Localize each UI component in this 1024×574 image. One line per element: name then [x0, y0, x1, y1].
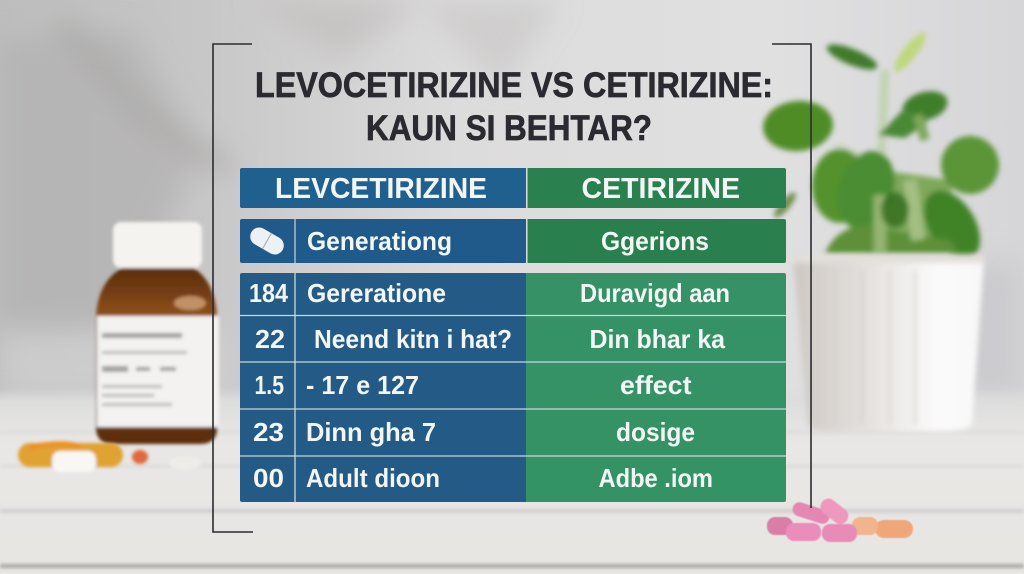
loose pills near bottle — [18, 443, 201, 472]
row 2: Neend kitn i hat? — [314, 324, 512, 354]
row 1: Gereratione — [307, 278, 446, 308]
row 2: 22 — [255, 324, 285, 354]
plant — [761, 29, 999, 269]
row 3: 1.5 — [254, 370, 284, 400]
frame bracket lines — [213, 44, 811, 532]
title — [255, 66, 773, 148]
row 5: 00 — [253, 463, 284, 493]
title: LEVOCETIRIZINE VS CETIRIZINE: — [255, 66, 773, 105]
icon: pill — [247, 224, 287, 258]
row 3: - 17 e 127 — [306, 370, 419, 400]
row 3: effect — [620, 370, 692, 400]
plant pot — [790, 254, 985, 431]
header: cetirizine: CETIRIZINE — [582, 173, 740, 205]
row 4: dosige — [616, 417, 695, 447]
generation row: Ggerions — [601, 226, 709, 256]
row 5: Adbe .iom — [598, 463, 713, 493]
pink and orange tablets — [767, 495, 913, 542]
row 2: Din bhar ka — [590, 324, 726, 354]
row 3 — [254, 370, 692, 400]
row 4: 23 — [253, 417, 284, 447]
row 2 — [255, 324, 726, 354]
comparison table — [240, 273, 786, 502]
row 1: 184 — [249, 278, 288, 308]
generation row: Generationg — [307, 226, 452, 256]
header: levocetirizine — [240, 168, 526, 208]
row 5 — [253, 463, 713, 493]
generation row — [240, 219, 786, 263]
header: levocetirizine: LEVCETIRIZINE — [275, 173, 487, 205]
header: cetirizine — [528, 168, 786, 208]
medicine bottle — [96, 222, 219, 444]
row 4: Dinn gha 7 — [306, 417, 436, 447]
table header row — [240, 168, 786, 208]
row 4 — [253, 417, 695, 447]
title: KAUN SI BEHTAR? — [366, 109, 652, 148]
row 5: Adult dioon — [306, 463, 440, 493]
row 1 — [249, 278, 730, 308]
row 1: Duravigd aan — [580, 278, 730, 308]
